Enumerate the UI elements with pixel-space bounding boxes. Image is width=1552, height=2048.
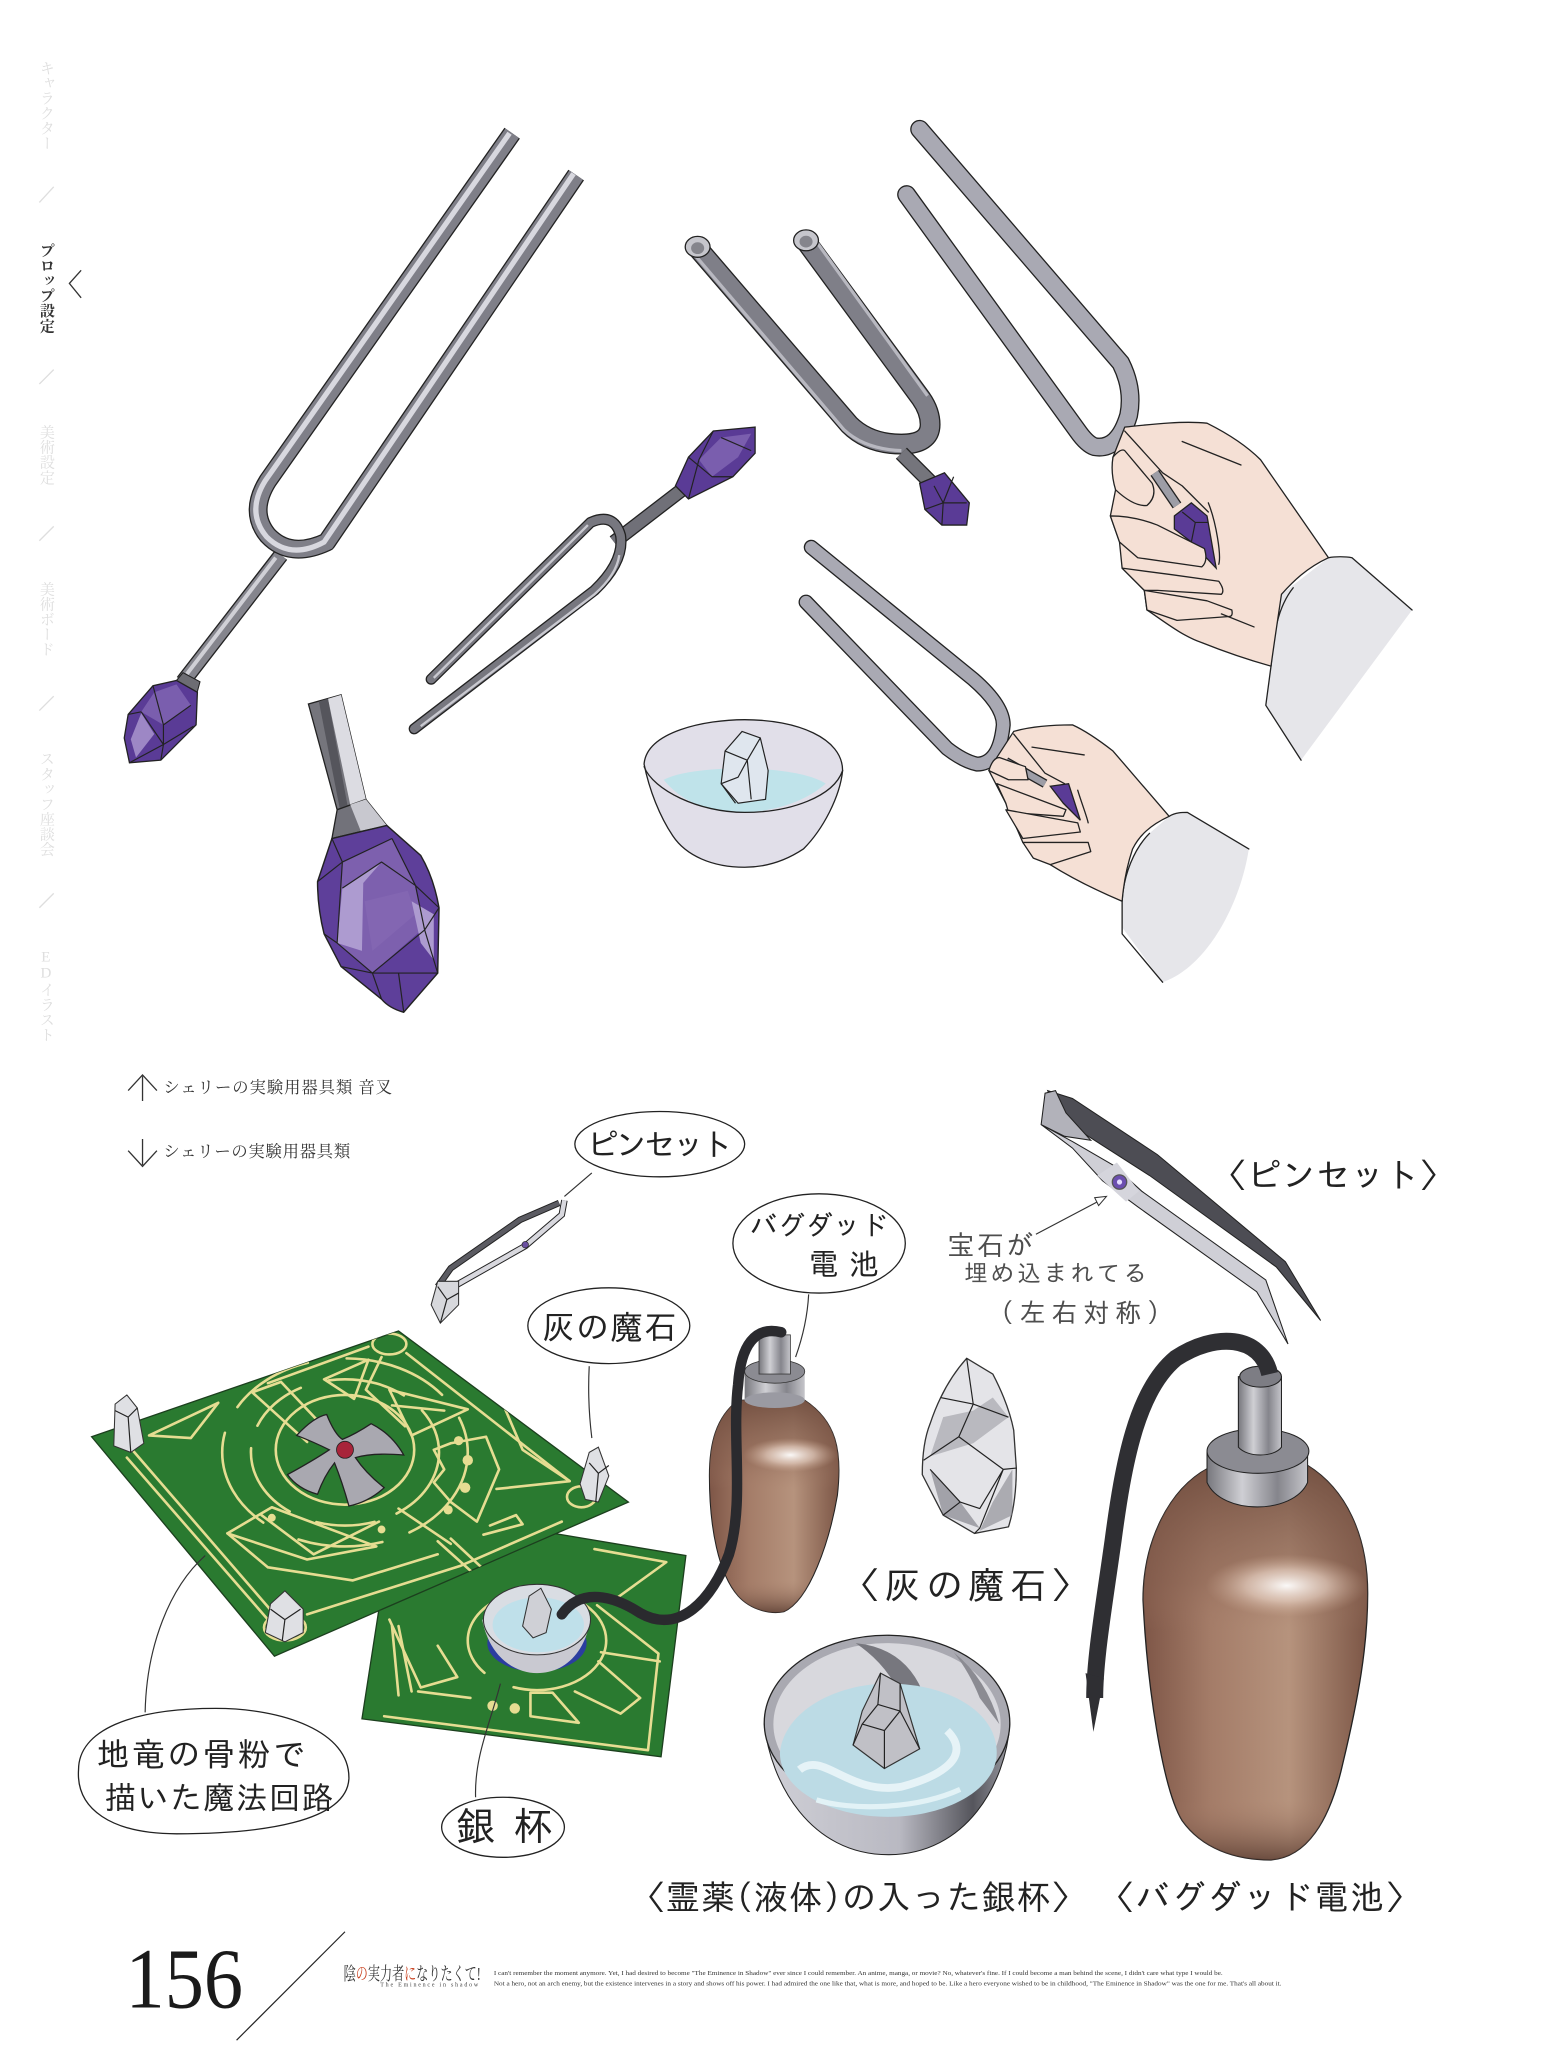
hand holding tuning fork, lower	[806, 547, 1249, 982]
bubble: tweezers: ピンセット	[587, 1128, 733, 1160]
silver cup close-up	[764, 1635, 1010, 1855]
small bowl with crystal	[644, 720, 843, 867]
cable to small battery and battery	[562, 1294, 839, 1620]
circuit board left with crystals and cross	[92, 1331, 628, 1656]
caption arrows and labels: シェリーの実験用器具類 音叉	[163, 1078, 392, 1097]
diagonal divider	[237, 1932, 345, 2040]
cross emblem	[288, 1415, 404, 1506]
series logo: 陰の実力者になりたくて!	[344, 1964, 481, 1984]
bubble: Baghdad battery: 電池	[809, 1249, 879, 1279]
sidebar navigation: EDイラスト	[38, 950, 54, 1042]
footer text: Not a hero, not an arch enemy, but the existence intervenes in a story and shows off his power. I had admired the one like that, what is more, and hoped to be. Like a hero everyone wished to be in childhood, "The Eminence in Shadow" was the one for me. That's all about it.	[494, 1980, 1282, 1987]
bubble: silver cup: 銀杯	[456, 1806, 553, 1845]
hand holding tuning fork, upper	[907, 129, 1412, 760]
bubble: tweezers	[575, 1112, 745, 1177]
note: gem embedded	[947, 1196, 1160, 1326]
caption: silver cup with spirit medicine: 〈霊薬(液体)の入った銀杯〉	[631, 1881, 1086, 1915]
series logo	[344, 1964, 481, 1989]
bubble: Baghdad battery	[733, 1194, 905, 1293]
fingers	[989, 758, 1028, 780]
caption: ash magic stone: 〈灰の魔石〉	[843, 1568, 1088, 1604]
caption: Baghdad battery: 〈バグダッド電池〉	[1100, 1881, 1420, 1915]
note: gem embedded: 埋め込まれてる	[964, 1260, 1147, 1284]
ash magic stone close-up	[922, 1358, 1016, 1533]
circuit board right (under)	[362, 1528, 686, 1757]
palm	[989, 725, 1169, 901]
large Baghdad battery	[1086, 1341, 1368, 1860]
page number: 156	[126, 1931, 243, 2027]
footer text	[494, 1970, 1282, 1987]
sidebar navigation: 美術設定	[38, 424, 54, 485]
sidebar navigation: プロップ設定	[38, 243, 54, 334]
sidebar navigation: キャラクター	[38, 60, 54, 150]
bubble: magic circuit: 描いた魔法回路	[105, 1781, 333, 1813]
bubble: magic circuit	[78, 1708, 349, 1834]
gem close-up	[308, 695, 439, 1012]
silver cup on circuit board	[482, 1584, 591, 1673]
bubble: magic circuit: 地竜の骨粉で	[97, 1737, 306, 1770]
bubble: Baghdad battery: バグダッド	[750, 1212, 888, 1240]
note: gem embedded: 宝石が	[947, 1231, 1033, 1259]
sidebar navigation: 美術ボード	[38, 581, 54, 657]
small tweezers	[431, 1200, 564, 1323]
large tweezers	[1041, 1091, 1321, 1344]
fingers	[1112, 450, 1154, 506]
sidebar navigation: スタッフ座談会	[38, 751, 54, 857]
series logo: The Eminence in shadow	[380, 1983, 479, 1989]
crystals on board	[114, 1395, 609, 1642]
palm	[1110, 422, 1328, 666]
caption arrows and labels	[128, 1075, 392, 1166]
bubble: ash magic stone: 灰の魔石	[542, 1310, 677, 1343]
caption: tweezers: 〈ピンセット〉	[1212, 1158, 1454, 1192]
bubble: ash magic stone	[528, 1288, 690, 1364]
bubble: silver cup	[442, 1797, 564, 1857]
leader lines	[145, 1173, 592, 1797]
sidebar navigation	[38, 60, 81, 1042]
caption arrows and labels: シェリーの実験用器具類	[163, 1142, 351, 1161]
footer text: I can't remember the moment anymore. Yet, I had desired to become "The Eminence in Shadow" ever since I could remember. An anime, manga, or movie? No, whatever's fine. If I could become a man behind the scene, I didn't care what type I would be.	[494, 1970, 1223, 1977]
tuning fork small middle	[414, 427, 755, 729]
note: gem embedded: (左右対称)	[1001, 1300, 1160, 1326]
tuning fork large with gem	[124, 133, 576, 763]
tuning fork metallic upper	[685, 230, 969, 525]
